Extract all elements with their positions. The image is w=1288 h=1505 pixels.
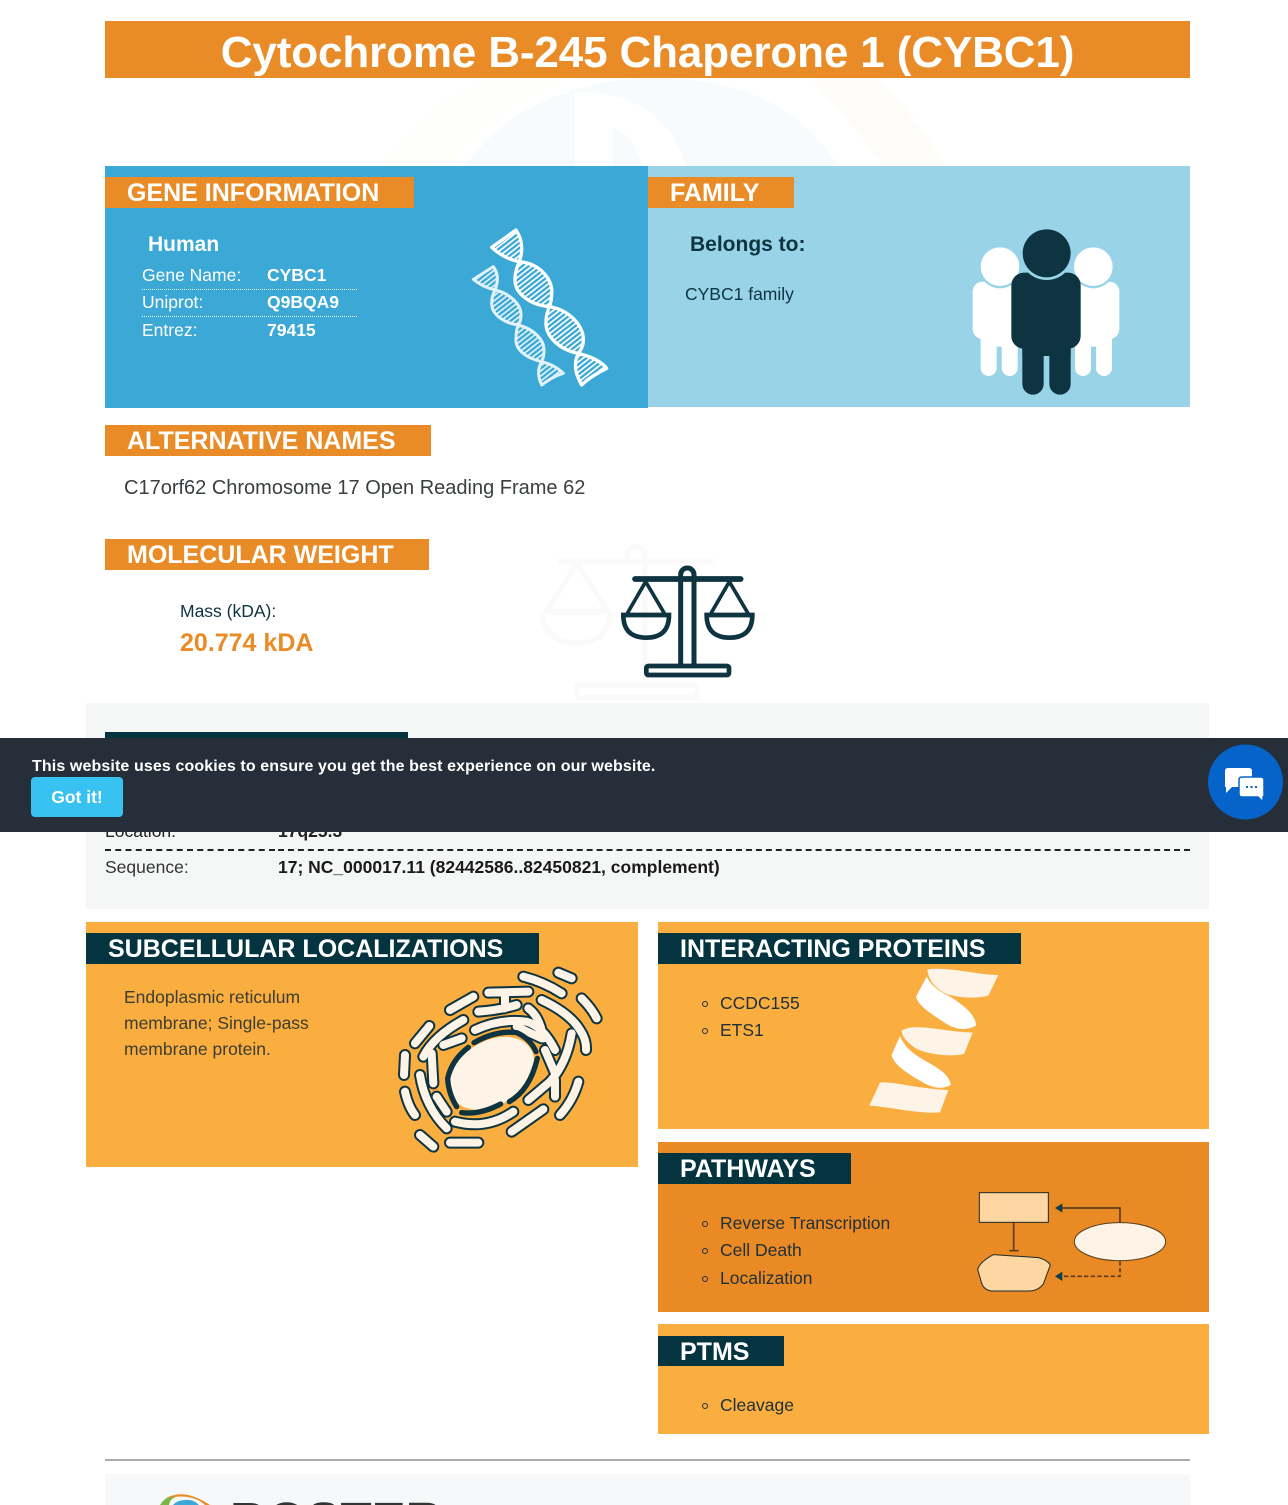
mass label: Mass (kDA): [180, 601, 276, 621]
cookie message: This website uses cookies to ensure you get the best experience on our website. [32, 758, 655, 775]
gene name row: CYBC1 [267, 265, 326, 285]
pathway item: Localization [720, 1268, 812, 1288]
panel: family [648, 166, 1190, 407]
panel: genomic location: 17q25.3 [278, 821, 342, 841]
gene name row [142, 267, 357, 290]
mass value: 20.774 kDA [180, 629, 313, 657]
chat button [1208, 744, 1283, 820]
sequence row [105, 857, 720, 877]
title [105, 21, 1190, 78]
icon: pathway diagram [977, 1192, 1166, 1292]
panel: subcellular localizations [86, 922, 638, 1167]
icon: scales [621, 566, 755, 678]
heading: subcellular localizations: SUBCELLULAR LOCALIZATIONS [108, 935, 503, 963]
uniprot row [142, 294, 357, 317]
cookie banner [0, 738, 1288, 832]
entrez row [142, 320, 316, 340]
dashed line right [278, 849, 1190, 851]
dashed line left [105, 849, 275, 851]
icon: endoplasmic reticulum [398, 966, 603, 1153]
uniprot row: Uniprot: [142, 292, 203, 312]
belongs to label: Belongs to: [690, 233, 806, 256]
localization text: membrane; Single-pass [124, 1013, 309, 1033]
localization text: Endoplasmic reticulum [124, 987, 300, 1007]
cookie button: Got it! [51, 787, 103, 807]
panel: interacting proteins [658, 922, 1209, 1129]
icon: dna [472, 228, 608, 387]
title: Cytochrome B-245 Chaperone 1 (CYBC1) [221, 28, 1074, 77]
species label: Human [148, 233, 219, 256]
panel: gene information [105, 166, 648, 408]
heading: gene information: GENE INFORMATION [127, 179, 379, 207]
panel: pathways [658, 1142, 1209, 1312]
heading: ptms: PTMS [680, 1338, 749, 1366]
panel: ptms [658, 1324, 1209, 1434]
footer divider [105, 1459, 1190, 1461]
sequence row: Sequence: [105, 857, 189, 877]
protein item: ETS1 [720, 1020, 764, 1040]
heading: molecular weight: MOLECULAR WEIGHT [127, 541, 394, 569]
panel: footer [105, 1474, 1190, 1505]
logo mark [160, 1494, 210, 1505]
ptm item: Cleavage [720, 1395, 794, 1415]
heading: pathways [658, 1153, 851, 1184]
alternative names text: C17orf62 Chromosome 17 Open Reading Frame 62 [124, 477, 585, 499]
entrez row: Entrez: [142, 320, 197, 340]
location row: Location: [105, 821, 176, 841]
heading: alternative names: ALTERNATIVE NAMES [127, 427, 396, 455]
heading: interacting proteins: INTERACTING PROTEINS [680, 935, 986, 963]
heading: family [648, 177, 794, 208]
pathway item: Reverse Transcription [720, 1213, 890, 1233]
panel: genomic location: 17; NC_000017.11 (82442586..82450821, complement) [278, 857, 720, 877]
icon: people [972, 229, 1120, 395]
cookie button [31, 777, 123, 817]
heading: pathways: PATHWAYS [680, 1155, 816, 1183]
localization text [124, 987, 309, 1059]
family value: CYBC1 family [685, 284, 794, 304]
entrez row: 79415 [267, 320, 316, 340]
heading: family: FAMILY [670, 179, 759, 207]
location row [105, 821, 342, 841]
icon: protein helix [869, 968, 998, 1113]
uniprot row: Q9BQA9 [267, 292, 339, 312]
heading: ptms [658, 1336, 784, 1366]
panel: genomic location [86, 703, 1209, 909]
protein item: CCDC155 [720, 993, 800, 1013]
background watermark [370, 78, 970, 166]
heading bar: genomic location [105, 732, 408, 763]
pathway item: Cell Death [720, 1240, 802, 1260]
localization text: membrane protein. [124, 1039, 271, 1059]
gene name row: Gene Name: [142, 265, 241, 285]
